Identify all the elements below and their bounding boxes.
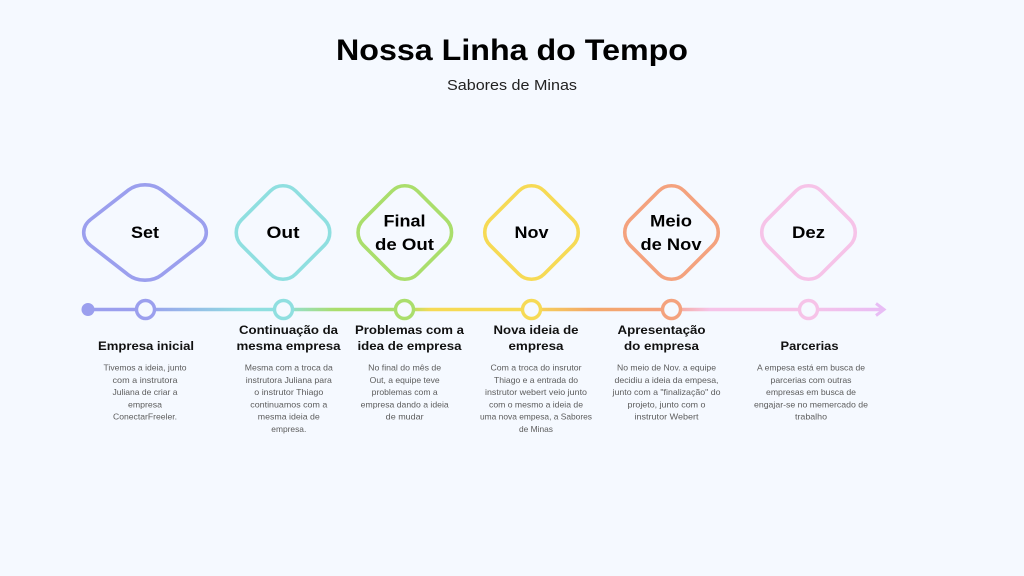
description: Nov: uma nova empesa, a Sabores bbox=[480, 413, 592, 422]
panel: Out bbox=[236, 186, 341, 434]
marker: Set bbox=[136, 300, 154, 318]
description: Meio de Nov bbox=[611, 364, 721, 422]
description: Final de Out: empresa dando a ideia bbox=[361, 400, 449, 409]
title: Nossa Linha do Tempo bbox=[336, 34, 688, 67]
description: Out: Mesma com a troca da bbox=[245, 364, 333, 372]
label: Dez: Dez bbox=[792, 223, 825, 242]
heading: Nova ideia de empresa: empresa bbox=[508, 339, 564, 353]
timeline bbox=[82, 300, 884, 318]
description: Nov: instrutor webert veio junto bbox=[485, 388, 587, 397]
label: Meio de Nov: de Nov bbox=[640, 235, 702, 254]
description: Out: o instrutor Thiago bbox=[254, 388, 324, 397]
description: Nov: Com a troca do insrutor bbox=[490, 364, 582, 372]
description: Final de Out: de mudar bbox=[386, 413, 424, 422]
panel: Set bbox=[84, 185, 206, 422]
description: Dez: engajar-se no memercado de bbox=[754, 400, 868, 409]
diamond: Set bbox=[84, 185, 206, 280]
description: Dez: trabalho bbox=[795, 413, 827, 422]
marker: Meio de Nov bbox=[662, 300, 680, 318]
description: Meio de Nov: decidiu a ideia da empesa, bbox=[614, 376, 718, 385]
description: Final de Out: No final do mês de bbox=[368, 364, 442, 372]
heading: Nova ideia de empresa bbox=[494, 323, 579, 353]
description: Set: Tivemos a ideia, junto bbox=[104, 364, 187, 372]
diamond: Out bbox=[236, 186, 330, 279]
description: Set: com a instrutora bbox=[112, 376, 178, 385]
marker: Out bbox=[274, 300, 292, 318]
diamond: Final de Out bbox=[358, 186, 452, 279]
description: Set: Juliana de criar a bbox=[112, 388, 178, 397]
description: Final de Out: Out, a equipe teve bbox=[370, 376, 440, 385]
description: Dez bbox=[754, 364, 868, 422]
arrow head bbox=[876, 304, 884, 316]
description: Meio de Nov: junto com a "finalização" do bbox=[611, 388, 721, 397]
panel: Meio de Nov bbox=[611, 186, 721, 422]
description: Meio de Nov: instrutor Webert bbox=[634, 413, 699, 422]
heading: Problemas com a idea de empresa: Problemas com a bbox=[355, 323, 464, 337]
panel: Dez bbox=[754, 186, 868, 422]
description: Dez: parcerias com outras bbox=[770, 376, 852, 385]
panel: Nov bbox=[480, 186, 592, 434]
label: Meio de Nov bbox=[640, 212, 702, 254]
start dot bbox=[82, 303, 94, 316]
timeline line bbox=[88, 308, 884, 311]
label: Out: Out bbox=[266, 223, 300, 242]
description: Meio de Nov: No meio de Nov. a equipe bbox=[617, 364, 716, 372]
description: Set: empresa bbox=[128, 400, 162, 409]
marker: Dez bbox=[800, 300, 818, 318]
panel: Final de Out bbox=[355, 186, 464, 422]
label: Final de Out bbox=[375, 212, 434, 254]
heading: Problemas com a idea de empresa bbox=[355, 323, 464, 353]
description: Dez: empresas em busca de bbox=[766, 388, 856, 397]
heading: Nova ideia de empresa: Nova ideia de bbox=[494, 323, 579, 337]
description: Dez: A empesa está em busca de bbox=[757, 364, 865, 372]
heading: Problemas com a idea de empresa: idea de empresa bbox=[358, 339, 462, 353]
label: Meio de Nov: Meio bbox=[650, 212, 692, 230]
description: Set bbox=[104, 364, 187, 422]
description: Nov bbox=[480, 364, 592, 434]
heading: Continuação da mesma empresa: Continuação da bbox=[239, 323, 338, 337]
description: Out: mesma ideia de bbox=[258, 413, 320, 422]
description: Set: ConectarFreeler. bbox=[113, 413, 177, 422]
heading: Parcerias: Parcerias bbox=[780, 339, 839, 353]
diamond: Nov bbox=[485, 186, 578, 279]
description: Meio de Nov: projeto, junto com o bbox=[628, 400, 706, 409]
description: Nov: Thiago e a entrada do bbox=[494, 376, 578, 385]
description: Out: continuamos com a bbox=[250, 400, 328, 409]
description: Nov: com o mesmo a ideia de bbox=[489, 400, 583, 409]
subtitle: Sabores de Minas bbox=[447, 77, 577, 94]
diamond: Dez bbox=[762, 186, 855, 279]
label: Final de Out: Final bbox=[384, 212, 426, 230]
label: Final de Out: de Out bbox=[375, 235, 434, 254]
heading: Continuação da mesma empresa bbox=[236, 323, 341, 353]
description: Final de Out: problemas com a bbox=[372, 388, 438, 397]
heading: Apresentação do empresa: Apresentação bbox=[618, 323, 706, 337]
label: Nov: Nov bbox=[514, 223, 549, 242]
heading: Empresa inicial: Empresa inicial bbox=[98, 339, 194, 353]
description: Final de Out bbox=[361, 364, 449, 422]
diamond: Meio de Nov bbox=[625, 186, 718, 279]
description: Out: instrutora Juliana para bbox=[246, 376, 332, 385]
marker: Nov bbox=[522, 300, 540, 318]
heading: Apresentação do empresa bbox=[618, 323, 706, 353]
description: Nov: de Minas bbox=[519, 425, 553, 434]
heading: Apresentação do empresa: do empresa bbox=[624, 339, 699, 353]
marker: Final de Out bbox=[396, 300, 414, 318]
description: Out bbox=[245, 364, 333, 434]
description: Out: empresa. bbox=[271, 425, 306, 434]
heading: Continuação da mesma empresa: mesma empresa bbox=[236, 339, 341, 353]
label: Set: Set bbox=[131, 223, 159, 242]
